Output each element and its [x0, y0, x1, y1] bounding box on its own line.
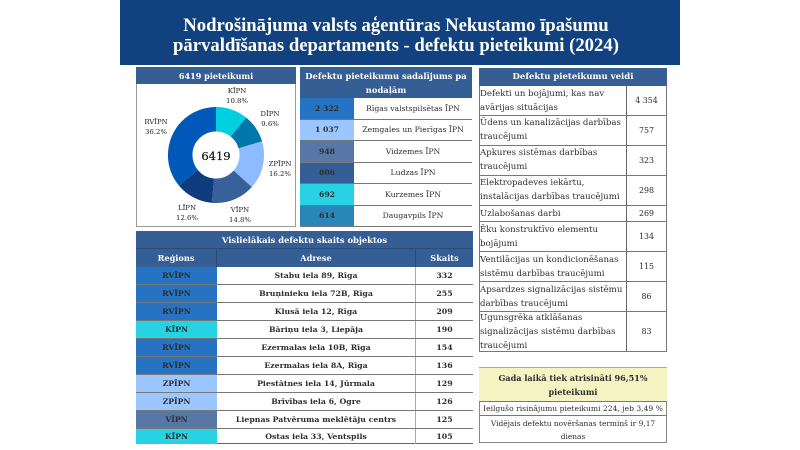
- row: security alarm: 86: [641, 292, 652, 301]
- row: Ezermalas 10B: RVĪPN: [162, 342, 191, 352]
- row: building elements: Ēku konstruktīvo elementu: [480, 224, 598, 234]
- label: KĪPN: 10.8%: [226, 97, 248, 105]
- row: fire alarm: signalizācijas sistēmu darbības: [480, 326, 616, 336]
- row: Brīvības iela: [136, 392, 473, 410]
- panel: breakdown by department: [300, 67, 472, 227]
- row: ventilation: sistēmu darbības traucējumi: [480, 268, 604, 278]
- row: Ludzas: 806: [319, 168, 335, 177]
- text: average fix time: dienas: [561, 432, 585, 440]
- label: KĪPN: [226, 87, 248, 105]
- row: electricity: instalācijas darbības traucējumi: [480, 192, 620, 202]
- label: RVĪPN: 36.2%: [145, 128, 167, 136]
- label: RVĪPN: RVĪPN: [144, 118, 168, 126]
- row: Ostas iela: 105: [436, 432, 453, 441]
- row: Kurzemes: [300, 184, 472, 206]
- row: Piestātnes iela: Piestātnes iela 14, Jūrmala: [257, 378, 375, 388]
- row: Bruņinieku iela: [136, 284, 473, 302]
- table header row: Reģions: [158, 253, 194, 263]
- label: VĪPN: [229, 206, 251, 224]
- row: Kurzemes: Kurzemes ĪPN: [385, 190, 441, 199]
- row: Liepnas centrs: 125: [436, 414, 453, 424]
- label: ZPĪPN: ZPĪPN: [269, 160, 291, 168]
- text: average fix time: [490, 418, 655, 440]
- text: long-running applications: [480, 402, 666, 416]
- row: Klusā iela: Klusā iela 12, Rīga: [275, 306, 357, 316]
- label: DĪPN: DĪPN: [261, 110, 279, 118]
- row: fire alarm: Ugunsgrēka atklāšanas: [480, 312, 582, 322]
- row: Vidzemes: Vidzemes ĪPN: [386, 147, 440, 156]
- title banner: [120, 0, 680, 65]
- row: security alarm: darbības traucējumi: [480, 298, 568, 308]
- label: VĪPN: 14.8%: [229, 216, 251, 224]
- panel heading: Defektu pieteikumu veidi: [513, 72, 633, 82]
- row: ventilation: 115: [639, 262, 654, 271]
- row: Klusā iela: RVĪPN: [162, 306, 191, 316]
- row: emergency-free defects: [480, 86, 666, 116]
- row: Ezermalas 8A: Ezermalas iela 8A, Rīga: [264, 360, 368, 370]
- row: Liepnas centrs: Liepnas Patvēruma meklētāju centrs: [236, 414, 396, 424]
- panel: total applications donut: [136, 67, 296, 227]
- label: VĪPN: VĪPN: [231, 206, 249, 214]
- table header row: [136, 249, 473, 266]
- row: water: traucējumi: [480, 132, 527, 142]
- label: KĪPN: KĪPN: [228, 87, 246, 95]
- panel heading: [300, 67, 472, 98]
- label: ZPĪPN: [268, 160, 292, 178]
- row: Stabu iela: Stabu iela 89, Rīga: [274, 270, 358, 280]
- panel heading: Defektu pieteikumu sadalījums pa: [305, 70, 467, 80]
- row: Ostas iela: KĪPN: [165, 432, 188, 441]
- row: Brīvības iela: Brīvības iela 6, Ogre: [271, 396, 361, 406]
- row: Kurzemes: 692: [319, 190, 335, 199]
- row: Bāriņu iela: [136, 320, 473, 338]
- row: Ezermalas 8A: 136: [436, 360, 453, 370]
- row: building elements: [480, 222, 666, 252]
- row: Brīvības iela: 126: [436, 396, 453, 406]
- row: Rīgas: 2 322: [315, 104, 339, 113]
- table header row: Adrese: [300, 253, 332, 263]
- row: heating: Apkures sistēmas darbības: [480, 148, 597, 158]
- row: emergency-free defects: Defekti un bojājumi, kas nav: [480, 88, 604, 98]
- row: security alarm: Apsardzes signalizācijas sistēmu: [480, 284, 622, 294]
- row: Rīgas: [300, 98, 472, 120]
- row: water: [480, 116, 666, 146]
- label: LĪPN: LĪPN: [178, 204, 196, 212]
- panel heading: Vislielākais defektu skaits objektos: [222, 234, 387, 244]
- row: water: Ūdens un kanalizācijas darbības: [480, 118, 621, 128]
- table header row: Skaits: [430, 253, 459, 263]
- row: Ezermalas 10B: 154: [436, 342, 453, 352]
- row: Bruņinieku iela: 255: [436, 288, 453, 298]
- row: electricity: 298: [639, 186, 654, 195]
- row: improvement works: Uzlabošanas darbi: [480, 208, 561, 218]
- row: Ludzas: [300, 162, 472, 184]
- row: Bruņinieku iela: RVĪPN: [162, 288, 191, 298]
- panel: top objects table: [136, 231, 473, 444]
- row: building elements: bojājumi: [480, 238, 518, 248]
- row: Daugavpils: 614: [319, 211, 335, 220]
- row: building elements: 134: [639, 232, 654, 241]
- callout heading: [479, 367, 667, 402]
- label: DĪPN: 9.6%: [261, 120, 279, 128]
- row: heating: 323: [639, 156, 654, 164]
- row: Vidzemes: [300, 141, 472, 162]
- row: Liepnas centrs: [136, 410, 473, 428]
- text: average fix time: Vidējais defektu novēršanas termiņš ir 9,17: [491, 418, 655, 428]
- row: heating: traucējumi: [480, 162, 527, 172]
- row: electricity: Elektropadeves iekārtu,: [480, 178, 584, 188]
- row: Daugavpils: Daugavpils ĪPN: [383, 211, 443, 220]
- row: Stabu iela: RVĪPN: [162, 270, 191, 280]
- row: ventilation: Ventilācijas un kondicionēšanas: [480, 254, 619, 264]
- label: LĪPN: [176, 204, 198, 222]
- label: LĪPN: 12.6%: [176, 214, 198, 222]
- row: Ludzas: Ludzas ĪPN: [391, 168, 435, 177]
- panel: yearly results: [479, 367, 667, 443]
- panel heading: 6419 pieteikumi: [179, 70, 253, 80]
- title banner: pārvaldīšanas departaments - defektu pieteikumi (2024): [173, 34, 619, 56]
- panel heading: [479, 68, 667, 86]
- panel heading: [136, 67, 296, 84]
- row: Ezermalas 8A: [136, 356, 473, 374]
- row: emergency-free defects: avārijas situācijas: [480, 102, 558, 112]
- row: Ezermalas 8A: RVĪPN: [162, 360, 191, 370]
- title banner: Nodrošinājuma valsts aģentūras Nekustamo īpašumu: [183, 15, 609, 36]
- row: electricity: [480, 176, 666, 206]
- row: heating: [480, 146, 666, 176]
- row: Vidzemes: 948: [319, 147, 335, 156]
- donut chart: 6419: [201, 149, 231, 163]
- row: Piestātnes iela: ZPĪPN: [163, 378, 190, 388]
- row: Ostas iela: Ostas iela 33, Ventspils: [265, 432, 367, 441]
- row: Liepnas centrs: VĪPN: [165, 414, 188, 424]
- row: Rīgas: Rīgas valstspilsētas ĪPN: [366, 104, 460, 113]
- panel heading: nodaļām: [366, 84, 406, 94]
- row: Zemgales: Zemgales un Pierīgas ĪPN: [362, 125, 464, 134]
- row: fire alarm: traucējumi: [480, 340, 527, 350]
- row: Brīvības iela: ZPĪPN: [163, 396, 190, 406]
- row: Zemgales: [300, 120, 472, 141]
- panel heading: [136, 231, 473, 249]
- callout heading: Gada laikā tiek atrisināti 96,51%: [498, 372, 648, 382]
- row: Bāriņu iela: 190: [436, 324, 453, 334]
- row: ventilation: [480, 252, 666, 282]
- row: security alarm: [480, 282, 666, 312]
- row: Bāriņu iela: KĪPN: [165, 324, 188, 334]
- row: fire alarm: 83: [641, 327, 652, 336]
- row: improvement works: 269: [639, 209, 654, 218]
- row: Ezermalas 10B: Ezermalas iela 10B, Rīga: [261, 342, 371, 352]
- panel: defect types: [479, 68, 667, 352]
- label: DĪPN: [260, 110, 280, 128]
- row: Daugavpils: [300, 206, 472, 227]
- row: Bāriņu iela: Bāriņu iela 3, Liepāja: [269, 324, 363, 334]
- row: Piestātnes iela: [136, 374, 473, 392]
- row: Klusā iela: [136, 302, 473, 320]
- donut chart: [168, 107, 264, 203]
- text: long-running applications: Ieilgušo risinājumu pieteikumi 224, jeb 3,49 %: [483, 404, 663, 413]
- row: fire alarm: [480, 312, 666, 352]
- row: Ostas iela: [136, 429, 453, 444]
- label: RVĪPN: [144, 118, 168, 136]
- row: Stabu iela: 332: [436, 270, 453, 280]
- callout heading: pieteikumi: [548, 386, 597, 396]
- row: Zemgales: 1 037: [315, 125, 339, 134]
- label: ZPĪPN: 16.2%: [269, 170, 291, 178]
- row: Ezermalas 10B: [136, 338, 473, 356]
- row: Bruņinieku iela: Bruņinieku iela 72B, Rīga: [259, 288, 373, 298]
- row: Piestātnes iela: 129: [436, 378, 453, 388]
- row: improvement works: [480, 206, 666, 222]
- row: Klusā iela: 209: [436, 306, 453, 316]
- row: Stabu iela: [136, 266, 473, 284]
- row: water: 757: [639, 126, 654, 135]
- row: emergency-free defects: 4 354: [635, 96, 658, 105]
